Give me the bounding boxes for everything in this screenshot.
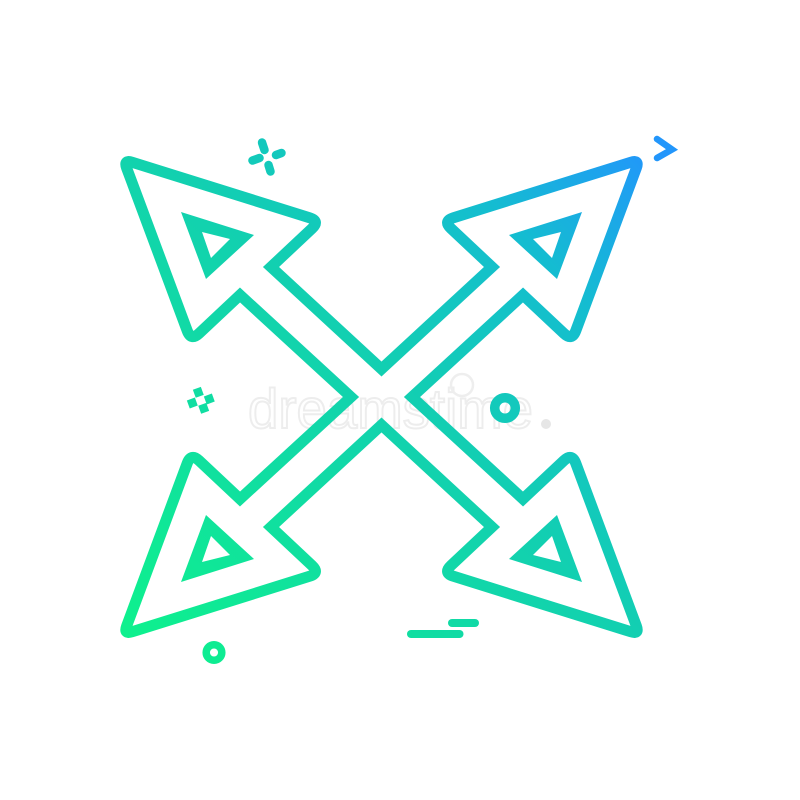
watermark — [248, 374, 551, 440]
watermark text: dreamstime — [248, 377, 533, 440]
inner triangle: bottom left — [181, 515, 254, 582]
icon: diamonds — [187, 387, 215, 414]
watermark swirl — [451, 374, 473, 396]
dashes — [407, 619, 479, 638]
inner triangle: top right — [509, 212, 582, 279]
icon: ring bottom — [206, 645, 222, 660]
arrows outline — [126, 162, 637, 632]
inner triangle: bottom right — [509, 515, 582, 582]
watermark dot — [541, 419, 551, 429]
icon: chevron — [657, 139, 672, 158]
inner triangle: top left — [181, 212, 254, 279]
icon: sparkle — [252, 142, 282, 172]
icon: ring right — [495, 398, 515, 418]
